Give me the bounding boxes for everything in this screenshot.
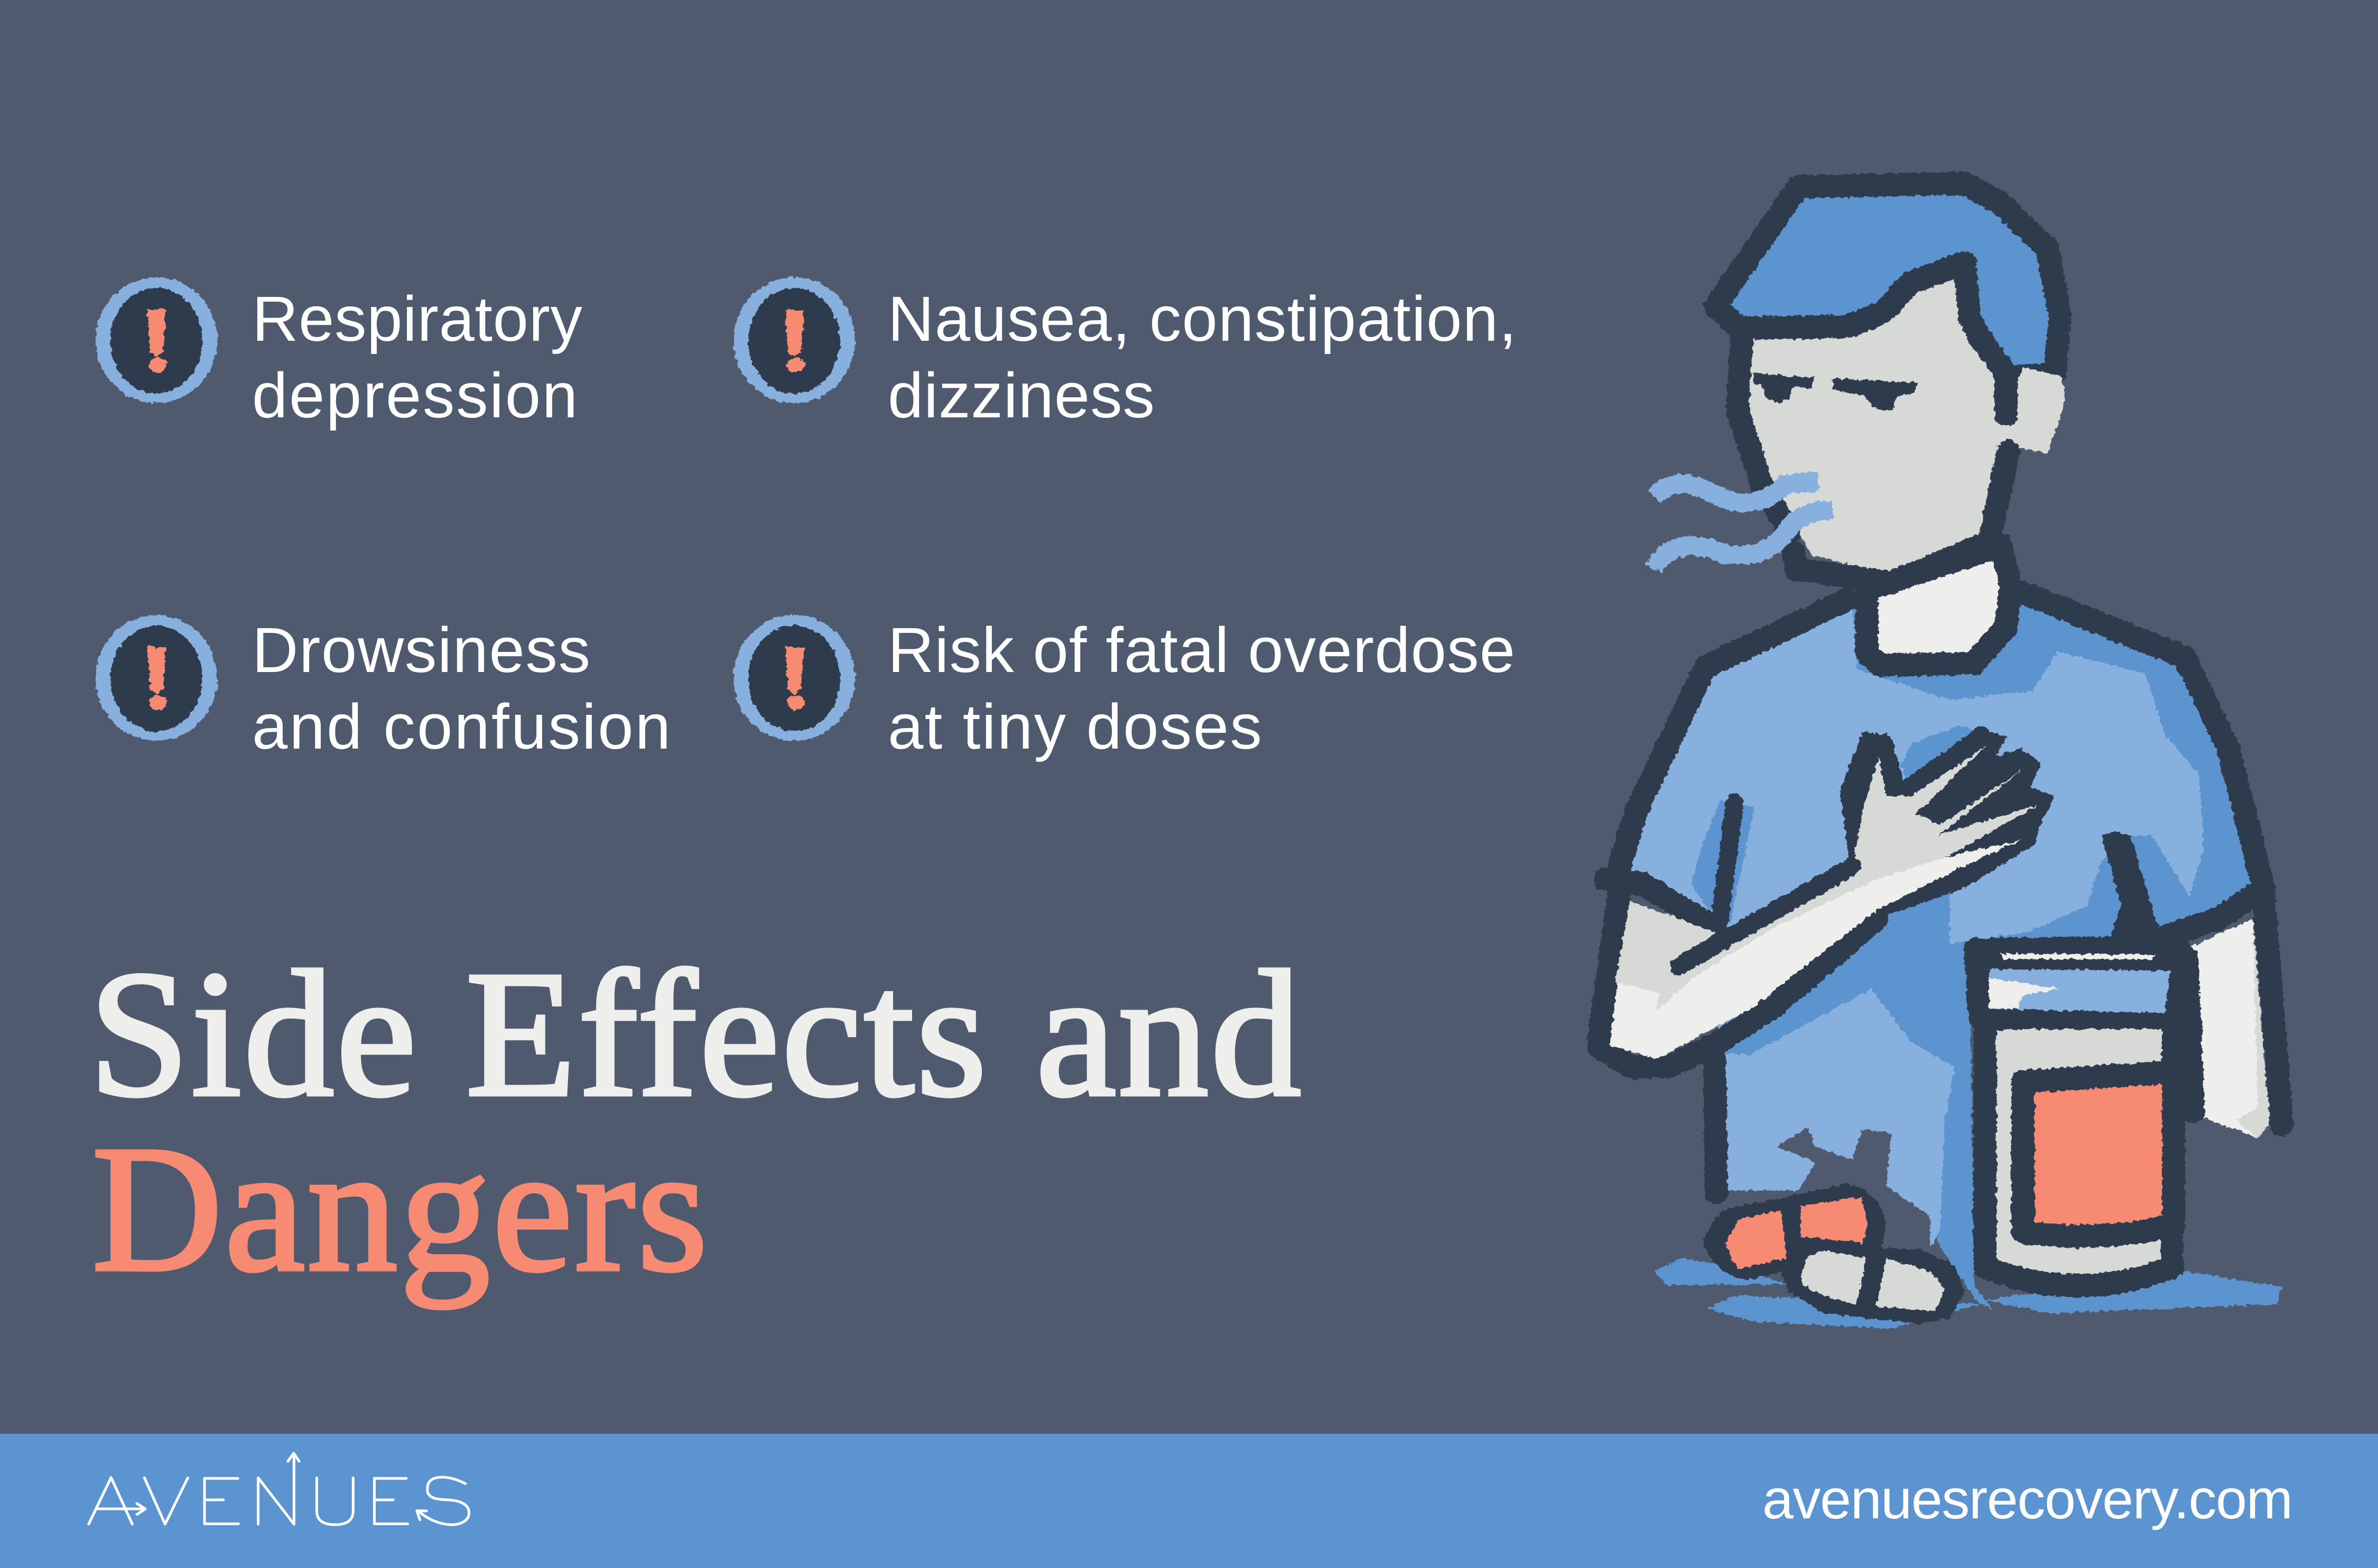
pill outline: [1703, 1184, 1887, 1280]
right eye: [1832, 378, 1918, 412]
pill halves: [1801, 1251, 1945, 1311]
body and bottle: [1598, 593, 2282, 1329]
item: nausea: [733, 277, 1517, 431]
item: fatal overdose: [733, 614, 1515, 762]
item: respiratory depression: [96, 277, 582, 431]
illustration: man with pill bottle: [1598, 183, 2282, 1329]
right arm: [2185, 919, 2270, 1138]
shirt lower highlight: [1725, 989, 1955, 1247]
logo: Avenues: [89, 1453, 469, 1525]
text: at tiny doses: [888, 690, 1262, 762]
ear: [2001, 367, 2065, 453]
label: [2023, 1072, 2173, 1236]
hand silhouette: [1669, 726, 2055, 974]
right arm shade: [2236, 919, 2270, 1138]
icon: warning: [733, 615, 855, 741]
face: [1740, 278, 2013, 574]
text: Nausea, constipation,: [888, 283, 1517, 354]
title: Side Effects and: [89, 934, 1301, 1134]
ground shadow: [1654, 1258, 2282, 1329]
breath: [1654, 481, 1833, 569]
face outline: [1738, 332, 2009, 583]
arm shade: [1615, 746, 2038, 1011]
grey pill: [1781, 1245, 1965, 1324]
icon: warning: [733, 277, 855, 403]
footer band: [0, 1434, 2378, 1568]
neck: [1867, 546, 2011, 665]
lid highlight: [1989, 954, 2155, 1009]
text: dizziness: [888, 359, 1155, 431]
text: Respiratory: [252, 283, 582, 354]
text: and confusion: [252, 690, 671, 762]
hair: [1715, 183, 2060, 377]
shirt highlight: [1613, 603, 2204, 1050]
text: Drowsiness: [252, 614, 590, 686]
pill outline: [1781, 1245, 1965, 1324]
orange pill: [1703, 1184, 1887, 1280]
website url: avenuesrecovery.com: [1762, 1468, 2293, 1530]
text: Risk of fatal overdose: [888, 614, 1515, 686]
pill halves: [1725, 1197, 1868, 1270]
bottle lid: [1975, 947, 2179, 1018]
left arm outline: [1598, 884, 1877, 1068]
fold lines: [1719, 802, 1735, 928]
shirt outline: [1605, 593, 2282, 1192]
fold wedge: [2101, 831, 2162, 941]
lid inner: [1989, 969, 2170, 1013]
head: [1654, 183, 2065, 665]
icon: warning: [96, 277, 217, 403]
shirt base: [1613, 593, 2263, 1309]
pill bottle: [1975, 947, 2179, 1286]
icon: warning: [96, 615, 217, 741]
bottle body: [1985, 1011, 2173, 1286]
left eye: [1753, 373, 1814, 403]
text: depression: [252, 359, 578, 431]
arm fill: [1610, 746, 2038, 1059]
forearm crease: [1679, 866, 1852, 966]
item: drowsiness: [96, 614, 671, 762]
title: Dangers: [92, 1108, 708, 1309]
shirt fold shadows: [1691, 726, 1994, 923]
